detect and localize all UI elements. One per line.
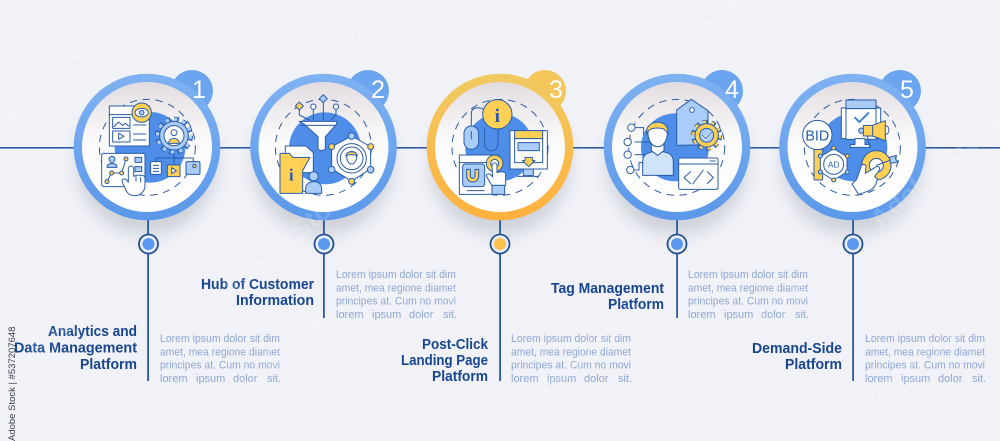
heading 4: Platform [608,297,664,313]
body text 5: Lorem ipsum dolor sit dim [865,333,985,345]
node 3 [490,234,510,254]
icon: tag manager person, tag, code window [624,99,725,195]
body text 2: principes at. Cum no movi [336,296,456,308]
icon: landing page with info and mouse: i [495,106,501,127]
timeline horizontal line [0,147,1000,149]
node 1 [139,234,158,254]
heading 5: Demand-Side [752,341,842,357]
body text 2 [336,269,457,321]
heading 2: Information [236,293,314,309]
body text 5: dolor [938,373,963,385]
body text 2: sit. [443,309,457,321]
badge number 4: 4 [725,76,739,104]
body text 3: principes at. Cum no movi [511,360,631,372]
body text 1: lorem [160,373,188,385]
heading 4 [551,281,664,313]
stock id side label: Adobe Stock | #537207648 [7,327,18,441]
heading 1: Analytics and [48,324,137,340]
body text 1: sit. [267,373,281,385]
body text 4: Lorem ipsum dolor sit dim [688,269,808,281]
heading 3: Landing Page [401,353,488,369]
stock watermarks: Adobe Stock [5,255,151,385]
body text 2: lorem [336,309,364,321]
body text 1: ipsum [196,373,225,385]
stock watermarks: Adobe Stock [185,305,331,435]
heading 1: Platform [80,357,137,373]
body text 4: principes at. Cum no movi [688,296,808,308]
body text 3: ipsum [547,373,576,385]
icon: bid, ad network, target and megaphone: BID [805,128,829,144]
body text 3: Lorem ipsum dolor sit dim [511,333,631,345]
heading 1 [14,324,137,373]
heading 3 [401,337,489,385]
body text 1: dolor [233,373,258,385]
heading 2 [201,277,314,309]
icon: analytics dashboard [99,99,200,196]
heading 3: Post-Click [422,337,489,353]
stock watermarks: Adobe Stock [670,275,816,405]
panel 4: Tag Management Platform [551,70,809,321]
body text 3: lorem [511,373,539,385]
node 4 [668,234,686,254]
body text 5: principes at. Cum no movi [865,360,985,372]
body text 4: dolor [761,309,786,321]
panel 2: Hub of Customer Information [201,70,457,321]
body text 5: sit. [972,373,986,385]
body text 2: amet, mea regione diamet [336,282,456,294]
panel 1: Analytics and Data Management Platform [14,70,281,385]
stock watermarks: Adobe Stock [845,295,991,425]
body text 5: amet, mea regione diamet [865,346,985,358]
body text 4 [688,269,809,321]
heading 1: Data Management [14,340,137,356]
badge number 3: 3 [549,76,563,104]
icon: bid, ad network, target and megaphone [803,99,900,195]
stock watermarks: Adobe Stock [215,175,361,305]
body text 4: ipsum [724,309,753,321]
stock watermarks: Adobe Stock [340,265,486,395]
icon: bid, ad network, target and megaphone: AD [828,159,839,169]
icon: landing page with info and mouse [452,99,548,195]
badge number 5: 5 [900,76,914,104]
icon: funnel, folder and customer network [275,95,374,195]
body text 1: principes at. Cum no movi [160,360,280,372]
heading 5 [752,341,842,373]
heading 5: Platform [785,357,842,373]
node 2 [314,234,334,254]
body text 2: dolor [409,309,434,321]
icon: funnel, folder and customer network: i [289,166,294,185]
heading 4: Tag Management [551,281,664,297]
body text 3 [511,333,632,385]
body text 4: sit. [795,309,809,321]
badge number 1: 1 [192,76,206,104]
body text 2: ipsum [372,309,401,321]
body text 5 [865,333,986,385]
body text 1 [160,333,281,385]
body text 4: lorem [688,309,716,321]
body text 5: ipsum [901,373,930,385]
heading 3: Platform [432,369,488,385]
body text 3: dolor [584,373,609,385]
body text 1: amet, mea regione diamet [160,346,280,358]
body text 3: sit. [618,373,632,385]
badge number 2: 2 [371,76,385,104]
heading 2: Hub of Customer [201,277,314,293]
body text 4: amet, mea regione diamet [688,282,808,294]
body text 2: Lorem ipsum dolor sit dim [336,269,456,281]
body text 1: Lorem ipsum dolor sit dim [160,333,280,345]
body text 5: lorem [865,373,893,385]
node 5 [844,234,862,254]
panel 3: Post-Click Landing Page Platform [401,70,632,385]
stock watermarks: Adobe Stock [505,295,651,425]
body text 3: amet, mea regione diamet [511,346,631,358]
panel 5: Demand-Side Platform [752,70,986,385]
